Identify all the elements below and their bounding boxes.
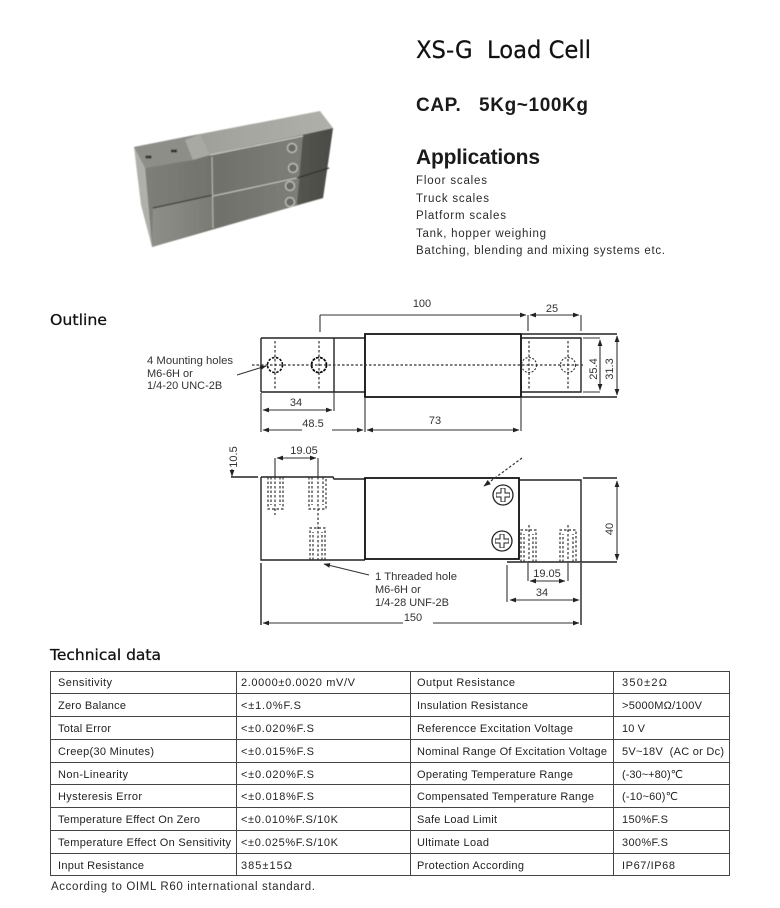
row: sensitivity / output resistance: 350±2Ω (622, 677, 667, 689)
applications list: Truck scales (416, 193, 489, 205)
row: hysteresis error / compensated temperature: Hysteresis Error (58, 791, 142, 803)
outline heading: Outline (50, 311, 107, 329)
row: temperature effect on zero / safe load limit (58, 814, 668, 826)
row: sensitivity / output resistance (58, 677, 667, 689)
row: temperature effect on zero / safe load limit: Safe Load Limit (417, 814, 497, 826)
row: zero balance / insulation resistance: Insulation Resistance (417, 700, 528, 712)
row: temperature effect on zero / safe load limit: 150%F.S (622, 814, 668, 826)
outline drawing: top view: 34 (290, 397, 302, 409)
applications heading: Applications (416, 146, 540, 169)
outline drawing: top view: 31.3 (604, 358, 616, 380)
row: temperature effect on sensitivity / ultimate load: 300%F.S (622, 837, 668, 849)
row: non-linearity / operating temperature: Operating Temperature Range (417, 769, 573, 781)
row: temperature effect on sensitivity / ultimate load: Temperature Effect On Sensitivity (58, 837, 232, 849)
outline drawing: side view: 19.05 (290, 445, 318, 457)
row: input resistance / protection: Input Resistance (58, 860, 144, 872)
row: temperature effect on sensitivity / ultimate load (58, 837, 668, 849)
row: creep / nominal range: 5V~18V (AC or Dc) (622, 746, 724, 758)
row: input resistance / protection: Protection According (417, 860, 524, 872)
row: total error / reference excitation voltage: <±0.020%F.S (241, 723, 314, 735)
row: input resistance / protection (58, 860, 675, 872)
row: zero balance / insulation resistance: Zero Balance (58, 700, 126, 712)
footnote: According to OIML R60 international standard. (51, 881, 315, 893)
outline drawing: side view: 1/4-28 UNF-2B (375, 597, 449, 609)
technical data table (50, 672, 730, 876)
row: zero balance / insulation resistance: <±1.0%F.S (241, 700, 301, 712)
row: non-linearity / operating temperature: <±0.020%F.S (241, 769, 314, 781)
icon: lower cross-head screw (492, 531, 512, 551)
row: temperature effect on sensitivity / ultimate load: <±0.025%F.S/10K (241, 837, 339, 849)
applications list (416, 175, 665, 257)
icon: upper cross-head screw (493, 485, 513, 505)
row: total error / reference excitation voltage: Total Error (58, 723, 111, 735)
outline drawing: top view: M6-6H or (147, 368, 193, 380)
row: sensitivity / output resistance: Sensitivity (58, 677, 112, 689)
row: sensitivity / output resistance: Output Resistance (417, 677, 515, 689)
outline drawing: side view: 150 (404, 612, 422, 624)
capacity heading: CAP. 5Kg~100Kg (416, 95, 588, 116)
row: zero balance / insulation resistance: >5000MΩ/100V (622, 700, 703, 712)
row: hysteresis error / compensated temperature (58, 791, 678, 803)
row: temperature effect on zero / safe load limit: <±0.010%F.S/10K (241, 814, 339, 826)
row: hysteresis error / compensated temperature: (-10~60)℃ (622, 791, 678, 803)
row: creep / nominal range (58, 746, 724, 758)
applications list: Tank, hopper weighing (416, 228, 546, 240)
row: hysteresis error / compensated temperature: <±0.018%F.S (241, 791, 314, 803)
row: non-linearity / operating temperature (58, 769, 683, 781)
row: total error / reference excitation voltage (58, 723, 646, 735)
row: creep / nominal range: Creep(30 Minutes) (58, 746, 154, 758)
row: zero balance / insulation resistance (58, 700, 703, 712)
row: total error / reference excitation voltage: Referencce Excitation Voltage (417, 723, 573, 735)
applications list: Floor scales (416, 175, 487, 187)
row: creep / nominal range: <±0.015%F.S (241, 746, 314, 758)
row: temperature effect on zero / safe load limit: Temperature Effect On Zero (58, 814, 200, 826)
outline drawing: top view: 25.4 (588, 358, 600, 380)
outline drawing: top view: 25 (546, 303, 558, 315)
row: temperature effect on sensitivity / ultimate load: Ultimate Load (417, 837, 489, 849)
row: hysteresis error / compensated temperature: Compensated Temperature Range (417, 791, 594, 803)
outline drawing: top view: 100 (413, 298, 431, 310)
row: non-linearity / operating temperature: (-30~+80)℃ (622, 769, 683, 781)
applications list: Batching, blending and mixing systems etc. (416, 245, 665, 257)
outline drawing: side view: 34 (536, 587, 548, 599)
row: creep / nominal range: Nominal Range Of Excitation Voltage (417, 746, 607, 758)
outline drawing: top view: 4 Mounting holes (147, 355, 234, 367)
row: non-linearity / operating temperature: Non-Linearity (58, 769, 128, 781)
title: XS-G Load Cell (416, 36, 591, 64)
outline drawing: top view: 48.5 (302, 418, 324, 430)
row: total error / reference excitation voltage: 10 V (622, 723, 646, 735)
outline drawing: side view: 10.5 (228, 446, 240, 468)
technical data heading: Technical data (49, 646, 161, 664)
row: input resistance / protection: IP67/IP68 (622, 860, 675, 872)
outline drawing: side view: M6-6H or (375, 584, 421, 596)
applications list: Platform scales (416, 210, 506, 222)
outline drawing: top view: 73 (429, 415, 441, 427)
row: input resistance / protection: 385±15Ω (241, 860, 292, 872)
outline drawing: side view: 1 Threaded hole (375, 571, 457, 583)
outline drawing: side view: 19.05 (533, 568, 561, 580)
product photo: load cell (134, 111, 333, 247)
outline drawing: side view (228, 445, 617, 625)
row: sensitivity / output resistance: 2.0000±0.0020 mV/V (241, 677, 356, 689)
outline drawing: top view (147, 298, 617, 432)
outline drawing: top view: 1/4-20 UNC-2B (147, 380, 222, 392)
outline drawing: side view: 40 (604, 523, 616, 535)
